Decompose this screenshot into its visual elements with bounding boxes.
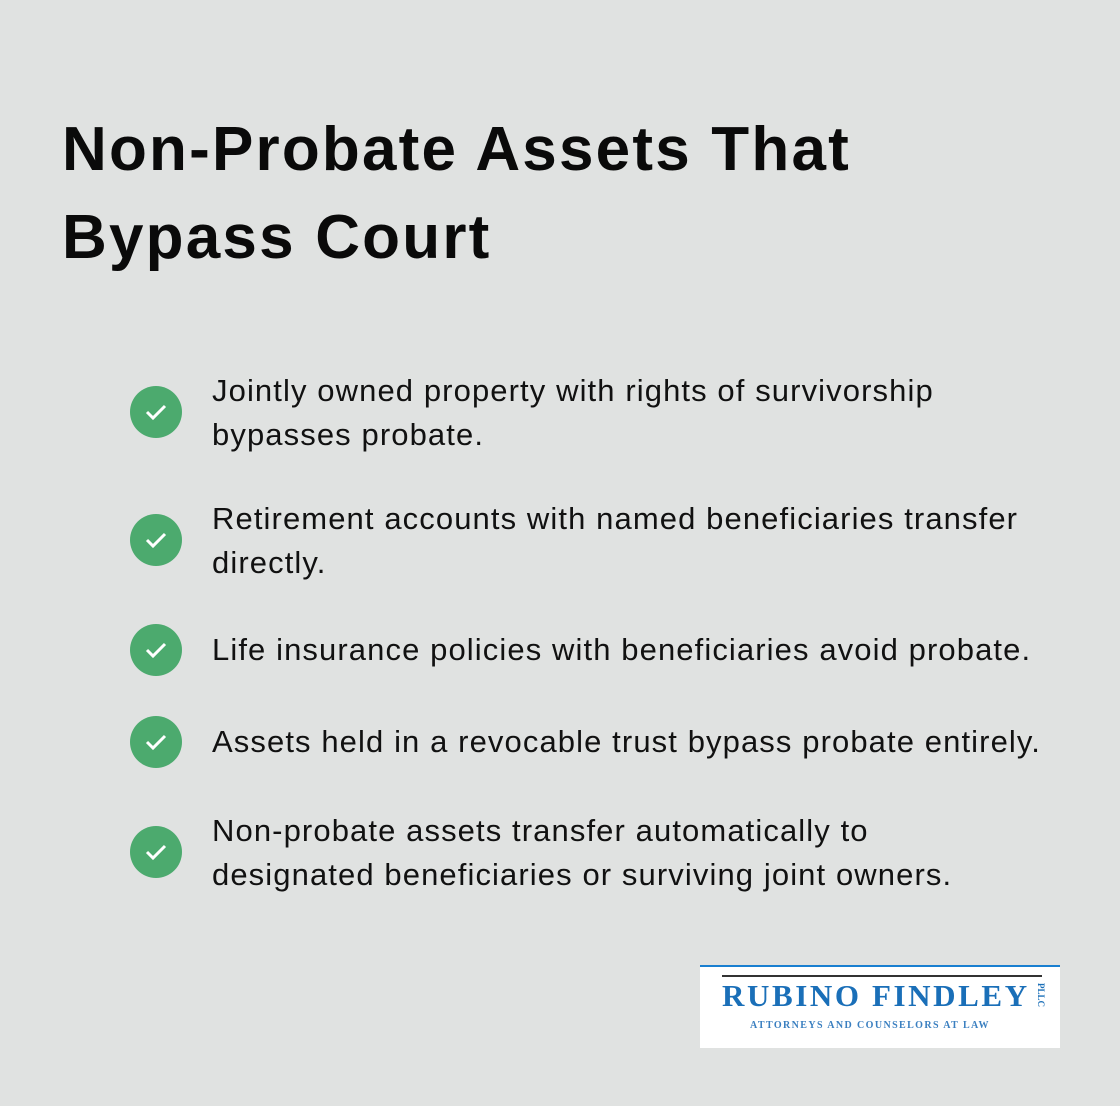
- text 2: directly.: [212, 545, 326, 580]
- logo: RUBINO FINDLEY: [722, 978, 1030, 1013]
- text 4: Assets held in a revocable trust bypass probate entirely.: [212, 724, 1041, 759]
- icon: check: [130, 514, 182, 566]
- text 5: designated beneficiaries or surviving joint owners.: [212, 857, 952, 892]
- text 3: Life insurance policies with beneficiaries avoid probate.: [212, 632, 1031, 667]
- item 1: [130, 373, 934, 452]
- icon: check: [130, 386, 182, 438]
- text 1: [212, 373, 934, 452]
- title: Bypass Court: [62, 203, 492, 272]
- title: Non-Probate Assets That: [62, 115, 851, 184]
- logo: PLLC: [1036, 983, 1046, 1007]
- logo: [700, 965, 1060, 1048]
- title: [62, 115, 851, 272]
- text 5: Non-probate assets transfer automatically to: [212, 813, 869, 848]
- text 5: [212, 813, 952, 892]
- icon: check: [130, 826, 182, 878]
- item 2: [130, 501, 1018, 580]
- item 5: [130, 813, 952, 892]
- text 1: bypasses probate.: [212, 417, 484, 452]
- logo: ATTORNEYS AND COUNSELORS AT LAW: [750, 1020, 990, 1031]
- text 2: [212, 501, 1018, 580]
- item 4: [130, 716, 1041, 768]
- text 1: Jointly owned property with rights of survivorship: [212, 373, 934, 408]
- text 2: Retirement accounts with named beneficiaries transfer: [212, 501, 1018, 536]
- icon: check: [130, 624, 182, 676]
- item 3: [130, 624, 1031, 676]
- icon: check: [130, 716, 182, 768]
